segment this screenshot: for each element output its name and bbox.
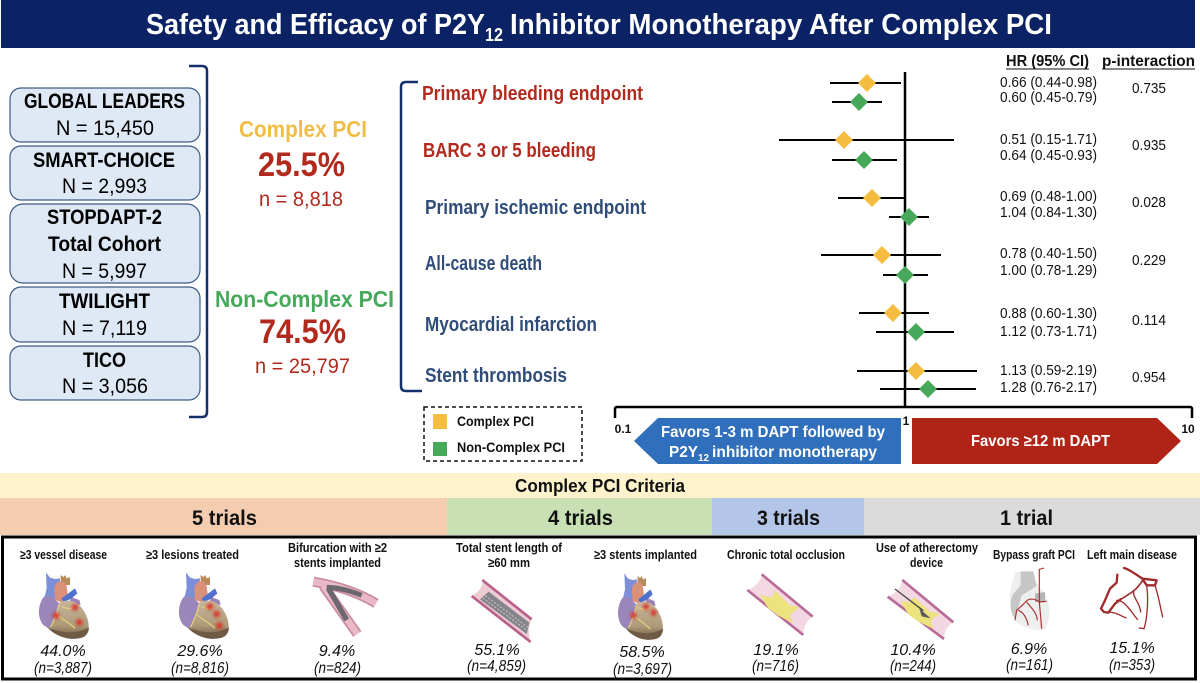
hazard ratio table: 0.78 (0.40-1.50): [1000, 246, 1097, 262]
heading: complex PCI criteria: Complex PCI Criteria: [515, 476, 686, 496]
criterion: chronic total occlusion: (n=716): [752, 658, 799, 675]
panel: criteria: [2, 537, 1196, 679]
hazard ratio table: HR (95% CI): [1006, 53, 1089, 70]
hazard ratio table: 0.028: [1132, 195, 1166, 211]
forest axis: 0.1: [615, 422, 632, 436]
criterion: 3 stents implanted: (n=3,697): [613, 661, 672, 678]
criterion: bypass graft: Bypass graft PCI: [993, 547, 1075, 562]
criterion: atherectomy: [876, 540, 979, 675]
panel: trials list: [10, 88, 200, 400]
title banner: Safety and Efficacy of P2Y: [146, 9, 485, 41]
trial: TWILIGHT: TWILIGHT: [59, 290, 150, 313]
hazard ratio table: 1.04 (0.84-1.30): [1000, 205, 1097, 221]
trial: TICO: TICO: [83, 349, 126, 372]
criterion: 3 stents implanted: ≥3 stents implanted: [594, 547, 697, 562]
criterion: total stent length: (n=4,859): [467, 658, 526, 675]
legend: Non-Complex PCI: [457, 440, 565, 455]
criterion: total stent length: Total stent length of: [456, 540, 563, 555]
endpoint labels: BARC 3 or 5 bleeding: [423, 140, 596, 162]
stat: non-complex PCI share: 74.5%: [259, 313, 346, 351]
hazard ratio table: 1.28 (0.76-2.17): [1000, 380, 1097, 396]
criterion: atherectomy: Use of atherectomy: [876, 540, 979, 555]
bracket: trials to population: [189, 66, 207, 417]
icon: bifurcation stent: [313, 582, 376, 634]
icon: heart with lesions: [179, 572, 229, 639]
stat: complex PCI share: 25.5%: [258, 146, 345, 184]
arrow: favors monotherapy: P2Y: [669, 444, 698, 461]
stat: complex PCI share: [239, 116, 367, 211]
hazard ratio table: 0.66 (0.44-0.98): [1000, 75, 1097, 91]
criterion: atherectomy: 10.4%: [890, 642, 936, 659]
stat: non-complex PCI share: n = 25,797: [255, 355, 350, 378]
criterion: chronic total occlusion: 19.1%: [753, 642, 799, 659]
title banner: 12: [485, 25, 503, 45]
criterion: 3 lesions treated: (n=8,816): [171, 660, 229, 677]
icon: bypass graft heart: [1009, 568, 1049, 630]
trial: GLOBAL LEADERS: N = 15,450: [56, 117, 154, 140]
criterion: 3 vessel disease: [20, 547, 107, 677]
criterion: 3 vessel disease: (n=3,887): [34, 660, 92, 677]
trial: SMART-CHOICE: N = 2,993: [62, 175, 147, 198]
hazard ratio table: 0.229: [1132, 253, 1166, 269]
icon: long stent: [472, 580, 532, 642]
hazard ratio table: 0.69 (0.48-1.00): [1000, 189, 1097, 205]
arrow: favors DAPT: [912, 418, 1181, 464]
title banner: Inhibitor Monotherapy After Complex PCI: [510, 9, 1052, 41]
endpoint labels: Primary bleeding endpoint: [422, 83, 643, 105]
criterion: total stent length: [456, 540, 563, 675]
hazard ratio table: 1.00 (0.78-1.29): [1000, 263, 1097, 279]
row: primary bleeding endpoint: [830, 74, 901, 111]
band: 5 trials: 5 trials: [192, 506, 257, 530]
criterion: bypass graft: 6.9%: [1011, 641, 1047, 658]
criterion: left main disease: Left main disease: [1087, 547, 1177, 562]
heading: complex PCI criteria: [0, 473, 1200, 498]
hazard ratio table: 0.51 (0.15-1.71): [1000, 132, 1097, 148]
criterion: bifurcation: 9.4%: [319, 643, 355, 660]
hazard ratio table: 0.60 (0.45-0.79): [1000, 90, 1097, 106]
criterion: atherectomy: device: [910, 555, 943, 570]
criterion: total stent length: ≥60 mm: [488, 555, 530, 570]
hazard ratio table: 1.13 (0.59-2.19): [1000, 363, 1097, 379]
icon: atherectomy device: [888, 580, 953, 639]
hazard ratio table: 0.935: [1132, 138, 1166, 154]
criterion: left main disease: 15.1%: [1109, 640, 1155, 657]
row: myocardial infarction: [859, 304, 954, 341]
arrow: favors monotherapy: [634, 418, 901, 464]
trial: STOPDAPT-2: [10, 204, 200, 283]
stat: complex PCI share: Complex PCI: [239, 116, 367, 142]
forest axis: 1: [903, 414, 910, 428]
criterion: 3 lesions treated: [146, 547, 239, 677]
endpoint labels: Primary ischemic endpoint: [425, 197, 646, 219]
hazard ratio table: 0.954: [1132, 370, 1166, 386]
criterion: bifurcation: [288, 540, 387, 677]
band: 3 trials: 3 trials: [757, 506, 820, 530]
criterion: 3 lesions treated: ≥3 lesions treated: [146, 547, 239, 562]
criterion: bifurcation: (n=824): [314, 660, 361, 677]
legend: [424, 407, 582, 461]
trial: TWILIGHT: [10, 287, 200, 342]
hazard ratio table: 1.12 (0.73-1.71): [1000, 324, 1097, 340]
criterion: chronic total occlusion: [727, 547, 845, 675]
criterion: bifurcation: stents implanted: [294, 555, 381, 570]
criterion: atherectomy: (n=244): [890, 658, 936, 675]
trial: TWILIGHT: N = 7,119: [62, 317, 147, 340]
criterion: 3 vessel disease: 44.0%: [40, 643, 86, 660]
hazard ratio table: p-interaction: [1102, 53, 1195, 70]
criterion: total stent length: 55.1%: [474, 642, 520, 659]
criterion: bypass graft: [993, 547, 1075, 674]
title banner: [1, 0, 1195, 48]
criterion: 3 stents implanted: [594, 547, 697, 678]
band: 5 trials: [0, 498, 447, 535]
endpoint labels: [422, 83, 646, 387]
band: 4 trials: 4 trials: [548, 506, 613, 530]
stat: complex PCI share: n = 8,818: [259, 188, 343, 211]
stat: non-complex PCI share: [215, 286, 394, 378]
hazard ratio table: 0.88 (0.60-1.30): [1000, 306, 1097, 322]
row: BARC 3 or 5 bleeding: [779, 131, 954, 169]
legend: Complex PCI: [457, 414, 534, 429]
row: stent thrombosis: [857, 362, 977, 398]
endpoint labels: All-cause death: [425, 253, 542, 275]
hazard ratio table: 0.114: [1132, 313, 1166, 329]
band: 4 trials: [447, 498, 712, 535]
icon: heart with stents: [618, 573, 663, 640]
endpoint labels: Stent thrombosis: [425, 365, 567, 387]
trial: STOPDAPT-2: Total Cohort: [48, 233, 161, 256]
criterion: 3 lesions treated: 29.6%: [176, 643, 223, 660]
trial: TICO: [10, 346, 200, 400]
row: all-cause death: [821, 246, 941, 284]
criterion: left main disease: (n=353): [1109, 657, 1155, 674]
icon: coronary tree: [1101, 568, 1163, 629]
band: 3 trials: [712, 498, 864, 535]
trial: STOPDAPT-2: STOPDAPT-2: [47, 206, 162, 229]
criterion: bifurcation: Bifurcation with ≥2: [288, 540, 387, 555]
trial: SMART-CHOICE: SMART-CHOICE: [33, 149, 175, 172]
icon: occluded vessel: [747, 574, 813, 635]
hazard ratio table: 0.64 (0.45-0.93): [1000, 148, 1097, 164]
row: primary ischemic endpoint: [838, 189, 929, 226]
arrow: favors monotherapy: Favors 1-3 m DAPT followed by: [661, 424, 885, 441]
arrow: favors monotherapy: 12: [698, 453, 709, 464]
criterion: 3 stents implanted: 58.5%: [619, 644, 665, 661]
trial: GLOBAL LEADERS: [10, 88, 200, 142]
hazard ratio table: [1000, 53, 1195, 396]
criterion: chronic total occlusion: Chronic total occlusion: [727, 547, 845, 562]
stat: non-complex PCI share: Non-Complex PCI: [215, 286, 394, 312]
trial: GLOBAL LEADERS: GLOBAL LEADERS: [24, 90, 185, 113]
band: 1 trial: 1 trial: [1000, 506, 1053, 530]
endpoint labels: Myocardial infarction: [425, 314, 597, 336]
arrow: favors monotherapy: inhibitor monotherapy: [712, 444, 877, 461]
hazard ratio table: 0.735: [1132, 81, 1166, 97]
bracket: endpoints: [401, 82, 422, 391]
trial: SMART-CHOICE: [10, 146, 200, 200]
band: 1 trial: [864, 498, 1200, 535]
criterion: left main disease: [1087, 547, 1177, 674]
trial: TICO: N = 3,056: [62, 375, 148, 398]
forest axis: [615, 407, 1195, 436]
forest axis: 10: [1181, 422, 1195, 436]
icon: heart: [39, 572, 89, 639]
arrow: favors DAPT: Favors ≥12 m DAPT: [971, 433, 1110, 450]
trial: STOPDAPT-2: N = 5,997: [62, 260, 147, 283]
criterion: bypass graft: (n=161): [1006, 657, 1053, 674]
criterion: 3 vessel disease: ≥3 vessel disease: [20, 547, 107, 562]
forest plot: [779, 72, 977, 407]
